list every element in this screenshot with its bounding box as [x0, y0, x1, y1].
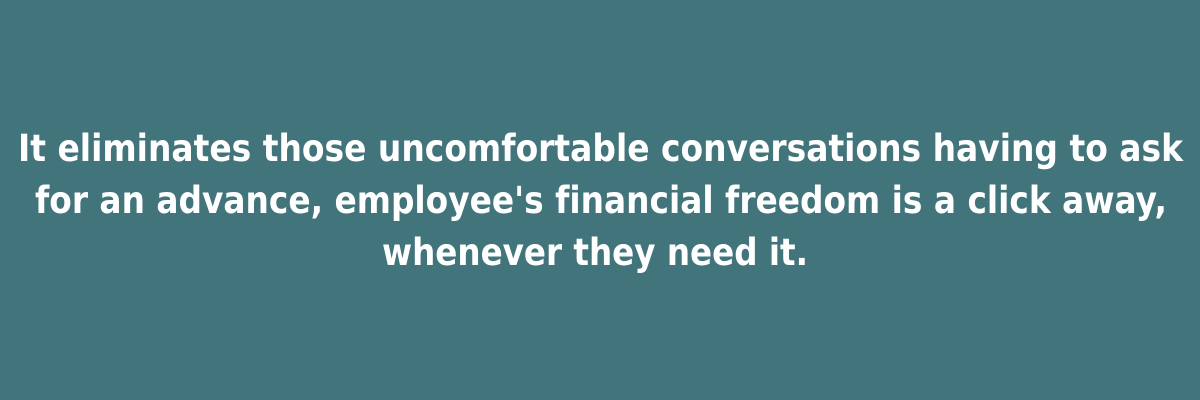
text block: statement: whenever they need it. [382, 231, 808, 274]
text block: statement [18, 127, 1184, 274]
